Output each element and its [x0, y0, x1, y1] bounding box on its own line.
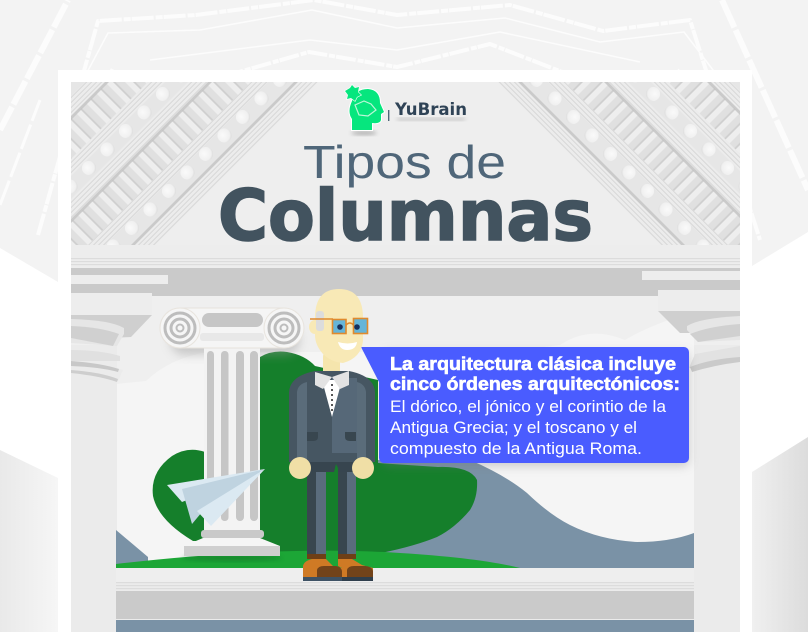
green bush	[153, 352, 477, 560]
floor	[71, 568, 740, 632]
jacket	[289, 371, 375, 462]
right column	[658, 290, 740, 568]
white card	[58, 70, 752, 632]
callout text: El dórico, el jónico y el corintio de la	[390, 398, 667, 416]
shirt and collar	[315, 371, 349, 417]
entablature	[71, 245, 740, 296]
hands	[289, 457, 311, 479]
shoes	[303, 559, 373, 581]
capital	[160, 308, 303, 348]
legs	[307, 472, 356, 559]
volute right	[264, 308, 304, 348]
mountains	[116, 460, 694, 568]
callout text: La arquitectura clásica incluye	[390, 353, 676, 374]
speech callout	[361, 347, 689, 466]
character: professor	[289, 289, 375, 581]
glasses	[310, 318, 368, 334]
paper plane	[167, 469, 265, 526]
panel: pediment header	[71, 82, 740, 245]
base	[201, 530, 264, 538]
trousers top	[307, 453, 357, 472]
head	[309, 289, 363, 363]
title: Columnas	[218, 175, 593, 257]
ionic column	[160, 308, 304, 561]
shaft	[204, 341, 260, 531]
callout text: Antigua Grecia; y el toscano y el	[390, 419, 637, 437]
ground	[116, 551, 520, 568]
logo: YuBrain	[394, 100, 467, 120]
neck	[323, 350, 340, 378]
volute left	[160, 308, 200, 348]
callout text: compuesto de la Antigua Roma.	[390, 440, 642, 458]
title	[218, 136, 593, 257]
title: Tipos de	[303, 136, 506, 188]
icon: brain head	[345, 85, 384, 130]
callout text	[390, 353, 680, 458]
logo	[345, 85, 467, 135]
callout text: cinco órdenes arquitectónicos:	[390, 373, 680, 394]
left column	[71, 293, 152, 568]
panel: scene wall	[71, 296, 740, 568]
cornice right	[499, 82, 740, 245]
clouds	[116, 313, 694, 568]
cornice left	[71, 82, 317, 245]
